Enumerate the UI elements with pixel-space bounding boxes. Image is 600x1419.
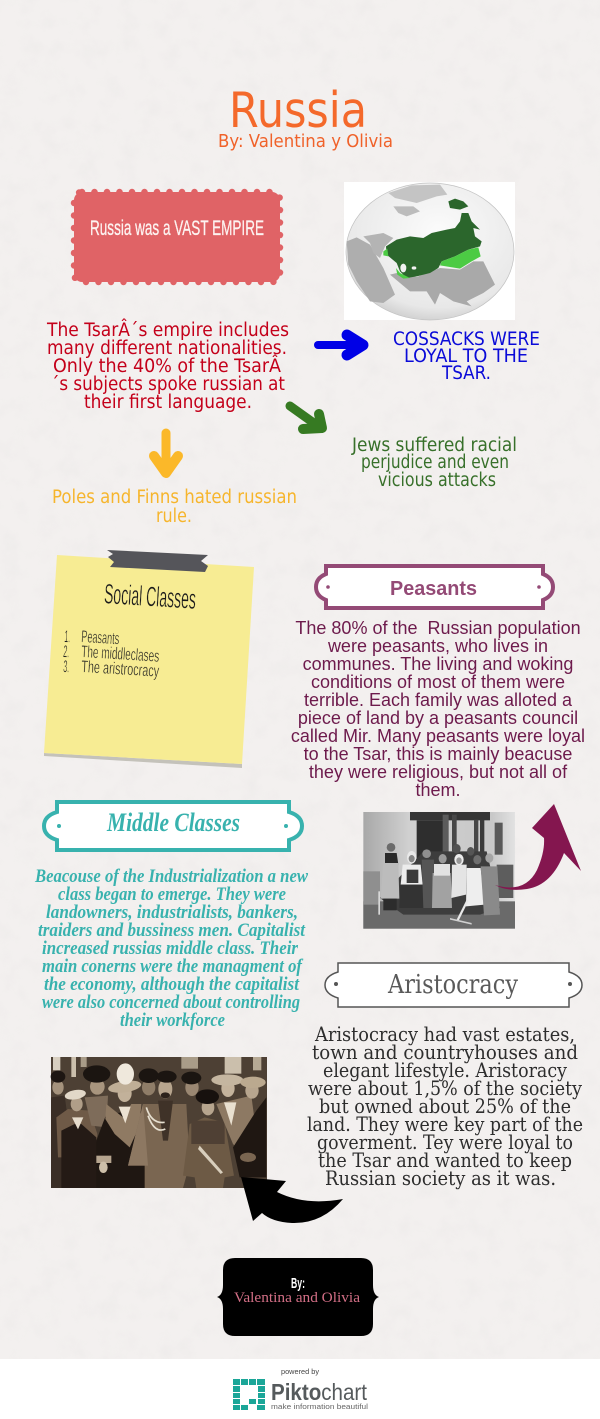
text block: peasants — [291, 618, 585, 800]
text block: middle classes: were also concerned about controlling — [42, 993, 300, 1013]
banner: middle classes: Middle Classes — [106, 808, 240, 837]
text block: aristocracy: the Tsar and wanted to keep — [318, 1149, 572, 1172]
text block: peasants: called Mir. Many peasants were loyal — [291, 726, 585, 746]
text block: cossacks: COSSACKS WERE — [393, 329, 540, 350]
text block: peasants: The 80% of the Russian population — [295, 618, 581, 638]
text block: middle classes: traiders and bussiness men. Capitalist — [38, 921, 306, 941]
banner: middle classes — [44, 802, 302, 850]
arrow: yellow down — [154, 433, 178, 473]
text block: middle classes: increased russias middle class. Their — [42, 939, 299, 959]
footer plaque: credits — [217, 1258, 379, 1336]
footer: piktochart branding: make information beautiful — [271, 1402, 368, 1411]
text block: nationalities — [46, 319, 289, 413]
map: globe showing the Russian empire — [344, 182, 515, 320]
note list — [63, 627, 160, 681]
arrow: black curved left — [241, 1177, 343, 1223]
text block: peasants: communes. The living and woking — [303, 654, 573, 674]
banner: aristocracy — [325, 963, 582, 1007]
note heading: Social Classes — [103, 578, 197, 615]
banner: aristocracy: Aristocracy — [387, 970, 518, 1000]
text block: aristocracy: but owned about 25% of the — [319, 1095, 571, 1118]
footer: piktochart branding: powered by — [281, 1367, 319, 1376]
text block: middle classes: their workforce — [120, 1011, 225, 1031]
text block: peasants: they were religious, but not all of — [309, 762, 568, 782]
arrow: green diagonal — [290, 406, 322, 429]
text block: nationalities: ´s subjects spoke russian at — [51, 374, 285, 395]
text block: peasants: conditions of most of them were — [311, 672, 565, 692]
arrow: blue right — [318, 335, 363, 355]
note list: 3. — [63, 657, 70, 676]
text block: cossacks — [393, 329, 540, 384]
text block: aristocracy: town and countryhouses and — [312, 1041, 578, 1064]
text block: aristocracy: Aristocracy had vast estates, — [314, 1023, 575, 1046]
title: Russia — [229, 82, 367, 139]
photo: peasants — [363, 812, 515, 929]
text block: aristocracy: goverment. Tey were loyal to — [317, 1131, 573, 1154]
photo: aristocracy group — [51, 1057, 267, 1188]
note list: 1. — [64, 627, 71, 646]
note list: The middleclases — [81, 642, 160, 666]
text block: poles and finns — [52, 487, 297, 527]
note list: 2. — [63, 642, 70, 661]
text block: aristocracy — [307, 1023, 583, 1190]
text block: cossacks: LOYAL TO THE — [404, 346, 528, 367]
text block: poles and finns: Poles and Finns hated russian — [52, 487, 297, 508]
text block: peasants: them. — [415, 780, 461, 800]
tape — [107, 550, 208, 572]
text block: middle classes: landowners, industrialists, bankers, — [46, 903, 298, 923]
text block: aristocracy: elegant lifestyle. Aristoracy — [323, 1059, 567, 1082]
arrow: purple curved up — [495, 804, 581, 890]
note list: The aristrocracy — [81, 657, 160, 681]
footer plaque: credits: Valentina and Olivia — [234, 1290, 360, 1306]
text block: peasants: to the Tsar, this is mainly beacuse — [304, 744, 572, 764]
banner: peasants: Peasants — [390, 578, 477, 600]
text block: jews: vicious attacks — [378, 470, 496, 491]
text block: nationalities: many different nationalities. — [47, 338, 287, 359]
text block: middle classes: main conerns were the managment of — [42, 957, 304, 977]
text block: poles and finns: rule. — [156, 506, 192, 527]
note list: Peasants — [81, 627, 120, 648]
text block: nationalities: The TsarÂ´s empire includes — [46, 319, 289, 341]
text block: middle classes: class began to emerge. They were — [58, 885, 286, 905]
callout: vast empire — [74, 192, 280, 282]
text block: peasants: were peasants, who lives in — [327, 636, 548, 656]
text block: cossacks: TSAR. — [441, 363, 491, 384]
banner: peasants — [316, 566, 553, 608]
text block: jews: Jews suffered racial — [351, 435, 517, 456]
text block: middle classes — [34, 867, 309, 1031]
footer: piktochart branding: Piktochart — [271, 1379, 368, 1405]
icon: piktochart logo — [233, 1379, 265, 1410]
text block: nationalities: their first language. — [84, 392, 252, 413]
text block: middle classes: the economy, although the capitalist — [44, 975, 300, 995]
text block: peasants: piece of land by a peasants council — [298, 708, 578, 728]
text block: nationalities: Only the 40% of the TsarÂ — [53, 355, 281, 377]
subtitle: authors: By: Valentina y Olivia — [218, 131, 393, 152]
text block: middle classes: Beacouse of the Industrialization a new — [34, 867, 309, 887]
text block: jews: perjudice and even — [361, 452, 509, 473]
callout: vast empire: Russia was a VAST EMPIRE — [90, 217, 264, 240]
text block: aristocracy: Russian society as it was. — [325, 1167, 556, 1190]
footer: piktochart branding — [0, 1359, 600, 1419]
sticky note: social classes — [44, 550, 254, 768]
footer plaque: credits: By: — [291, 1275, 305, 1292]
text block: peasants: terrible. Each family was alloted a — [304, 690, 573, 710]
text block: jews — [351, 435, 517, 491]
